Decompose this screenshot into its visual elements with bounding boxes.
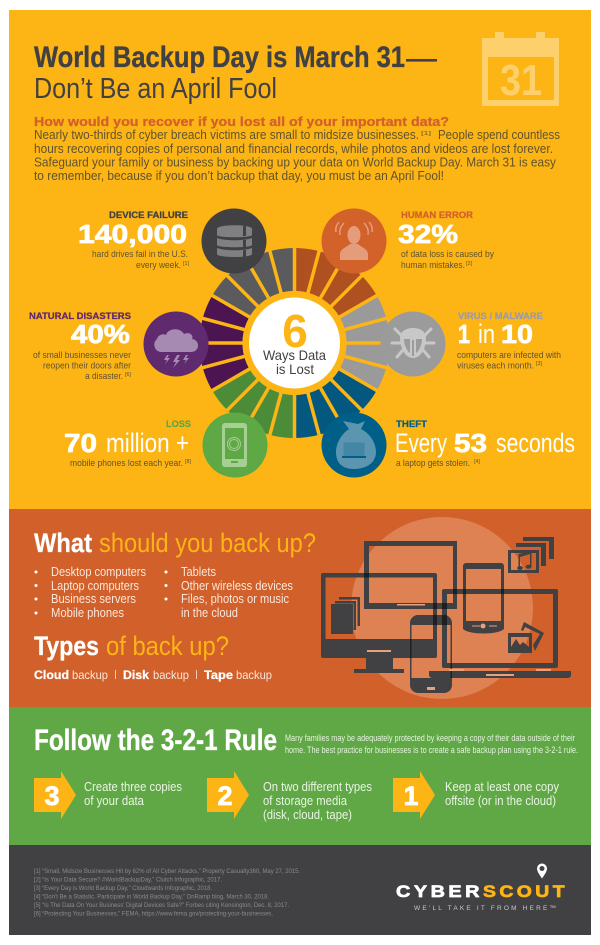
step 2: arrow and text: On two different types	[263, 779, 372, 794]
stat: device failure: 140,000	[78, 219, 187, 249]
logo: cyberscout: WE’LL TAKE IT FROM HERE™	[414, 905, 556, 912]
step 2: arrow and text: of storage media	[263, 793, 348, 808]
stat: loss: mobile phones lost each year.	[70, 458, 183, 469]
stat: device failure: hard drives fail in the U.S.	[92, 249, 188, 260]
center hub: 6 ways data is lost: is Lost	[276, 361, 314, 377]
stat: natural disasters: NATURAL DISASTERS	[29, 311, 131, 322]
step 1: arrow and text: 1	[403, 781, 419, 811]
stat: virus malware: computers are infected with	[457, 350, 561, 361]
stat: theft	[395, 419, 575, 469]
title	[34, 41, 437, 105]
step 1: arrow and text: offsite (or in the cloud)	[445, 793, 556, 808]
list: devices to back up: Files, photos or music	[181, 591, 289, 606]
stat: theft: 53	[454, 428, 487, 458]
icon: calendar: 31	[500, 56, 542, 105]
intro text: Safeguard your family or business by backing up your data on World Backup Day. March 31 is easy	[34, 156, 557, 170]
center hub: 6 ways data is lost	[242, 291, 346, 395]
text: backup types	[34, 668, 272, 682]
step 3: arrow and text: 3	[44, 781, 60, 811]
icon: lost mobile phone	[202, 412, 268, 478]
center hub: 6 ways data is lost: Ways Data	[263, 347, 326, 363]
panel: yellow intro and six ways	[9, 10, 591, 509]
stat: virus malware: 1	[458, 319, 470, 349]
panel: 3-2-1 rule	[9, 707, 591, 845]
title: Don’t Be an April Fool	[34, 73, 277, 105]
stat: device failure: every week.	[136, 260, 181, 271]
footnotes: [5] “Is The Data On Your Business’ Digital Devices Safe?” Forbes citing Kensington, Dec. 8, 2017.	[34, 902, 289, 909]
title: World Backup Day is March 31	[34, 41, 405, 74]
text: backup types: Cloud	[34, 668, 69, 682]
list: devices to back up: Laptop computers	[51, 578, 139, 593]
icon: natural disaster storm cloud	[144, 312, 208, 376]
stat: human error: 32%	[398, 219, 458, 249]
icon: theft money bag with laptop	[322, 412, 386, 478]
list: devices to back up: in the cloud	[181, 605, 238, 620]
intro text: to remember, because if you don’t backup that day, you must be an April Fool!	[34, 169, 444, 183]
intro text: How would you recover if you lost all of your important data?	[34, 115, 449, 129]
stat: virus malware: viruses each month.	[457, 360, 534, 372]
stat: loss: [8]	[185, 459, 192, 465]
step 3: arrow and text: Create three copies	[84, 779, 182, 794]
list: devices to back up: Tablets	[181, 564, 216, 579]
heading: types of back up: Types	[34, 631, 99, 661]
stat: loss: 70	[64, 428, 97, 458]
stat: virus malware	[457, 311, 561, 372]
list: devices to back up: Other wireless devices	[181, 578, 293, 593]
stat: natural disasters: a disaster.	[85, 371, 123, 382]
stat: virus malware: VIRUS / MALWARE	[458, 311, 543, 322]
stat: loss	[64, 419, 192, 469]
logo: cyberscout: CYBER	[396, 882, 483, 901]
stat: theft: Every	[395, 428, 447, 458]
stat: loss: LOSS	[166, 419, 191, 430]
step 2: arrow and text: (disk, cloud, tape)	[263, 807, 352, 822]
stat: loss: million +	[106, 428, 189, 458]
stat: human error	[398, 210, 494, 271]
stat: device failure: DEVICE FAILURE	[109, 210, 188, 221]
intro text: hours recovering copies of personal and financial records, while photos and videos are lost forever.	[34, 142, 553, 156]
stat: theft: seconds	[496, 428, 575, 458]
step 1: arrow and text	[393, 771, 559, 819]
step 2: arrow and text	[207, 771, 372, 822]
heading: what should you back up	[34, 528, 316, 558]
footnotes: [1] “Small, Midsize Businesses Hit by 62% of All Cyber Attacks,” Property Casualty360, May 27, 2015.	[34, 868, 300, 875]
text: backup types: backup	[72, 668, 108, 682]
heading: what should you back up: What	[34, 528, 92, 558]
intro text: People spend countless	[438, 128, 560, 142]
footnotes	[34, 868, 300, 918]
icon: calendar	[482, 32, 559, 106]
stat: device failure: [1]	[183, 261, 190, 267]
step 3: arrow and text	[34, 771, 182, 819]
stat: natural disasters: [6]	[125, 372, 132, 378]
intro text: [1]	[421, 131, 432, 137]
step 3: arrow and text: of your data	[84, 793, 145, 808]
text: backup types: Tape	[204, 668, 233, 682]
stat: human error: of data loss is caused by	[401, 249, 494, 260]
list: devices to back up: Mobile phones	[51, 605, 124, 620]
stat: theft: THEFT	[396, 419, 427, 430]
icon: virus bug	[380, 312, 446, 376]
stat: virus malware: 10	[501, 319, 533, 349]
list: devices to back up: Desktop computers	[51, 564, 146, 579]
panel: footer	[9, 845, 591, 935]
step 2: arrow and text: 2	[217, 781, 233, 811]
footnotes: [4] “Don’t Be a Statistic. Participate in World Backup Day,” OnRamp blog, March 30, 2018.	[34, 894, 269, 900]
intro text	[34, 115, 560, 183]
chart: radial wheel of six loss causes	[194, 243, 394, 443]
list: devices to back up: Business servers	[51, 591, 136, 606]
icon: device failure drives	[202, 208, 266, 274]
stat: human error: human mistakes.	[401, 260, 465, 271]
stat: device failure	[78, 210, 190, 271]
heading: follow the 3-2-1 rule: Follow the 3-2-1 Rule	[34, 724, 277, 757]
stat: theft: [4]	[474, 459, 481, 465]
text: backup types: Disk	[123, 668, 149, 682]
text: backup types: backup	[153, 668, 189, 682]
heading: what should you back up: should you back up?	[99, 528, 316, 558]
step 1: arrow and text: Keep at least one copy	[445, 779, 559, 794]
stat: theft: a laptop gets stolen.	[396, 458, 470, 469]
heading: types of back up	[34, 631, 229, 661]
stat: natural disasters	[29, 311, 132, 382]
panel: what to back up	[9, 509, 591, 707]
illustration: devices over circle	[321, 517, 571, 699]
stat: virus malware: [3]	[536, 361, 543, 367]
logo: cyberscout: SCOUT	[483, 882, 568, 901]
stat: human error: [2]	[466, 261, 473, 267]
stat: natural disasters: 40%	[71, 319, 130, 349]
text: backup types: backup	[236, 668, 272, 682]
footnotes: [3] “Every Day is World Backup Day,” Cloudwards Infographic, 2018.	[34, 885, 212, 892]
footnotes: [2] “Is Your Data Secure? #WorldBackupDay,” Clutch Infographic, 2017.	[34, 876, 222, 884]
stat: virus malware: in	[478, 319, 495, 349]
heading: types of back up: of back up?	[106, 631, 229, 661]
stat: natural disasters: of small businesses never	[33, 350, 131, 361]
intro text: Nearly two-thirds of cyber breach victims are small to midsize businesses.	[34, 128, 419, 142]
stat: human error: HUMAN ERROR	[401, 210, 473, 221]
center hub: 6 ways data is lost: 6	[282, 305, 308, 357]
footnotes: [6] “Protecting Your Businesses,” FEMA, https://www.fema.gov/protecting-your-businesses.	[34, 910, 273, 918]
icon: human error person	[322, 208, 386, 274]
logo: cyberscout	[396, 864, 568, 912]
list: devices to back up	[34, 564, 293, 620]
stat: natural disasters: reopen their doors after	[43, 360, 131, 372]
text: rule explanation	[285, 733, 578, 756]
